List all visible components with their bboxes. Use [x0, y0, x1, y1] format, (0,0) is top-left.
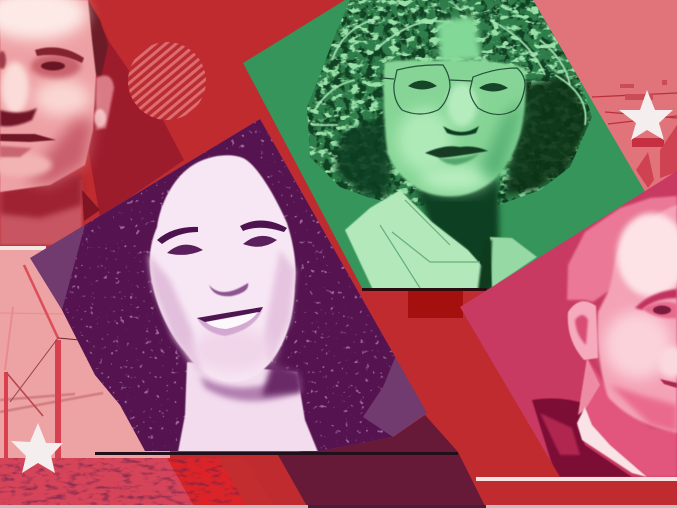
divider: black line under purple portrait	[95, 452, 458, 455]
hair	[300, 0, 600, 210]
head	[0, 0, 96, 192]
neck	[585, 358, 677, 477]
panel: wind turbine landscape	[0, 250, 170, 460]
ear	[96, 76, 114, 130]
panel: pink right portrait	[450, 165, 677, 480]
panel: dark red diagonal band	[85, 15, 184, 218]
turbine right	[10, 265, 80, 458]
panel: purple portrait	[30, 119, 427, 451]
divider: white line under top left portrait	[0, 246, 46, 250]
turbine left	[4, 307, 43, 458]
eye and brow	[31, 54, 81, 78]
face	[384, 60, 526, 196]
panel: bottom strip	[0, 505, 677, 508]
panel: pink poster background top right	[533, 0, 677, 195]
panel: red field	[0, 458, 275, 508]
panel: green portrait	[243, 0, 645, 290]
ear	[568, 301, 598, 360]
neck shadow	[415, 180, 500, 290]
icon: star bottom left	[11, 423, 63, 473]
icon: striped circle	[128, 42, 206, 120]
glasses	[382, 65, 532, 115]
divider: white line lower right	[476, 477, 677, 481]
neck	[178, 362, 318, 452]
mouth	[197, 308, 263, 336]
nose	[443, 126, 479, 136]
nostril	[0, 108, 37, 126]
neck	[0, 180, 82, 245]
nose	[209, 283, 248, 296]
forehead	[437, 15, 482, 62]
panel: top left man portrait	[0, 0, 114, 245]
hair	[567, 196, 677, 302]
mouth	[425, 146, 488, 158]
robe	[532, 398, 632, 477]
eye	[642, 302, 677, 318]
divider: black line under green portrait	[362, 288, 487, 291]
mouth	[0, 134, 56, 142]
eyes	[408, 80, 508, 92]
panel: red dark square	[408, 290, 463, 318]
panel: dark plum stripe	[278, 415, 486, 508]
face	[597, 205, 677, 433]
collar	[82, 190, 100, 221]
smile	[660, 379, 677, 388]
collar	[577, 407, 647, 477]
eyebrows	[157, 227, 198, 244]
hair	[62, 119, 396, 451]
face	[150, 155, 296, 382]
eyes	[167, 236, 277, 255]
collar shadow	[478, 240, 492, 290]
hair	[88, 0, 108, 78]
icon: star top right	[619, 90, 673, 140]
sweater	[345, 190, 484, 290]
brow	[635, 289, 677, 310]
